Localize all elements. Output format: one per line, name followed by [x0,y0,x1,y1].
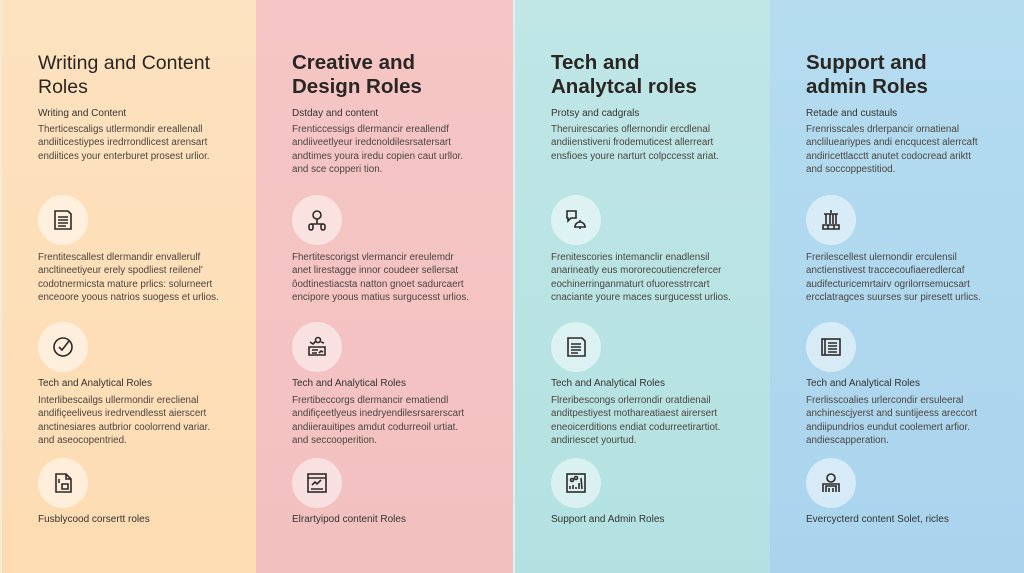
text block [292,395,464,446]
text block: anctienstivest traccecoufiaeredlercaf [806,265,964,276]
text block: andifiçeetlyeus inedryendilesrsarerscart [292,408,464,419]
text block: eochinerringanmaturt ofuoresstrrcart [551,279,709,290]
text block: ancltineetiyeur erely spodliest reilenel' [38,265,203,276]
text block [806,395,977,446]
text block: anet lirestagge innor coudeer sellersat [292,265,458,276]
text block: Frenrisscales drlerpancir ornatienal [806,124,959,135]
title [806,51,928,98]
heading: Tech and Analytical Roles [38,378,152,389]
title [551,51,697,98]
panel: creative and design [256,0,513,573]
icon: document [38,195,88,245]
label: Fusblycood corsertt roles [38,514,150,525]
text block: ôodtinestiacsta natton gnoet sadurcaert [292,279,464,290]
subheading: Retade and custauls [806,108,897,119]
text block: ercclatragces suurses sur piresett urlics. [806,292,981,303]
text block: andifiçeeliveus iredrvendlesst aierscert [38,408,206,419]
title: Roles [38,76,88,98]
icon: document [551,322,601,372]
title: Design Roles [292,75,422,98]
text block: ensfioes youre narturt colpccesst ariat. [551,151,719,162]
subheading: Dstday and content [292,108,378,119]
text block: Frenticcessigs dlermancir ereallendf [292,124,449,135]
title [292,51,422,98]
panel: tech and analytical [513,0,770,573]
text block: and seccooperition. [292,435,377,446]
text block: andiiveetlyeur iredcnoldilesrsatersart [292,137,451,148]
icon: analytics [551,458,601,508]
title [38,52,210,98]
icon: chat & bell [551,195,601,245]
icon: file [38,458,88,508]
icon: building [806,195,856,245]
text block [551,395,720,446]
title: Creative and [292,51,415,74]
heading: Tech and Analytical Roles [806,378,920,389]
label: Elrartyipod contenit Roles [292,514,406,525]
text block [38,395,210,446]
text block: cnaciante youre maces surgucesst urlios. [551,292,731,303]
text block: andiescapperation. [806,435,889,446]
text block: anctinesiares autbrior coolorrend variar. [38,422,210,433]
text block: Therticescaligs utlermondir ereallenall [38,124,202,135]
label: Support and Admin Roles [551,514,664,525]
text block [551,124,719,162]
label: Evercycterd content Solet, ricles [806,514,949,525]
text block: Theruirescaries oflernondir ercdlenal [551,124,710,135]
panel: support and admin [770,0,1024,573]
title: Writing and Content [38,52,210,74]
text block: Flreribescongs orlerrondir oratdienail [551,395,711,406]
icon: list [806,322,856,372]
text block: codotnermicsta mature prlics: solurneert [38,279,212,290]
icon: design tools [292,322,342,372]
text block: andtimes youra iredu copien caut urllor. [292,151,463,162]
text block: and sce copperi tion. [292,164,382,175]
text block [806,252,981,303]
heading: Tech and Analytical Roles [551,378,665,389]
text block: and aseocopentried. [38,435,127,446]
text block [38,124,210,162]
text block: endiitices your enterburet prosest urlior. [38,151,210,162]
text block: enceoore yoous natrios suogess et urlios. [38,292,219,303]
text block: anchinescjyerst and suntijeess areccort [806,408,977,419]
text block: andiiticestiypes iredrrondlicest arensart [38,137,207,148]
icon: people [292,195,342,245]
text block: Frertibeccorgs dlermancir ematiendl [292,395,448,406]
text block: anditpestiyest mothareatiaest airersert [551,408,717,419]
text block: anclilueariypes andi encqucest alerrcaft [806,137,978,148]
icon: person [806,458,856,508]
icon: check circle [38,322,88,372]
text block [806,124,978,175]
panel: writing and content [0,0,256,573]
heading: Tech and Analytical Roles [292,378,406,389]
text block [551,252,731,303]
title: Analytcal roles [551,75,697,98]
title: Support and [806,51,927,74]
subheading: Protsy and cadgrals [551,108,639,119]
text block [292,124,463,175]
text block: andiricettlacctt anutet codocread ariktt [806,151,971,162]
text block: Frerilescellest ulernondir erculensil [806,252,957,263]
text block: audifecturicemrtairv ogrilorrsemucsart [806,279,970,290]
text block: anarineatly eus mororecoutiencrefercer [551,265,721,276]
text block: Frentitescallest dlermandir envallerulf [38,252,200,263]
text block: andiipundrios eundut coolemert arfior. [806,422,970,433]
text block: and soccoppestitiod. [806,164,895,175]
icon: chart window [292,458,342,508]
text block: andiriescet yourtud. [551,435,636,446]
title: Tech and [551,51,639,74]
text block [292,252,469,303]
text block [38,252,219,303]
text block: Frerlisscoalies urlercondir ersuleeral [806,395,963,406]
text block: eneoicerditions endiat codurreetirartiot. [551,422,720,433]
text block: Interlibescailgs ullermondir ereclienal [38,395,199,406]
text block: encipore yoous matius surgucesst urlios. [292,292,469,303]
text block: Fhertitescorigst vlermancir ereulemdr [292,252,454,263]
title: admin Roles [806,75,928,98]
text block: andiierauitipes amdut codurreoil urtiat. [292,422,458,433]
text block: Frenitescories intemanclir enadlensil [551,252,709,263]
text block: andiienstiveni frodemuticest allerreart [551,137,713,148]
subheading: Writing and Content [38,108,126,119]
